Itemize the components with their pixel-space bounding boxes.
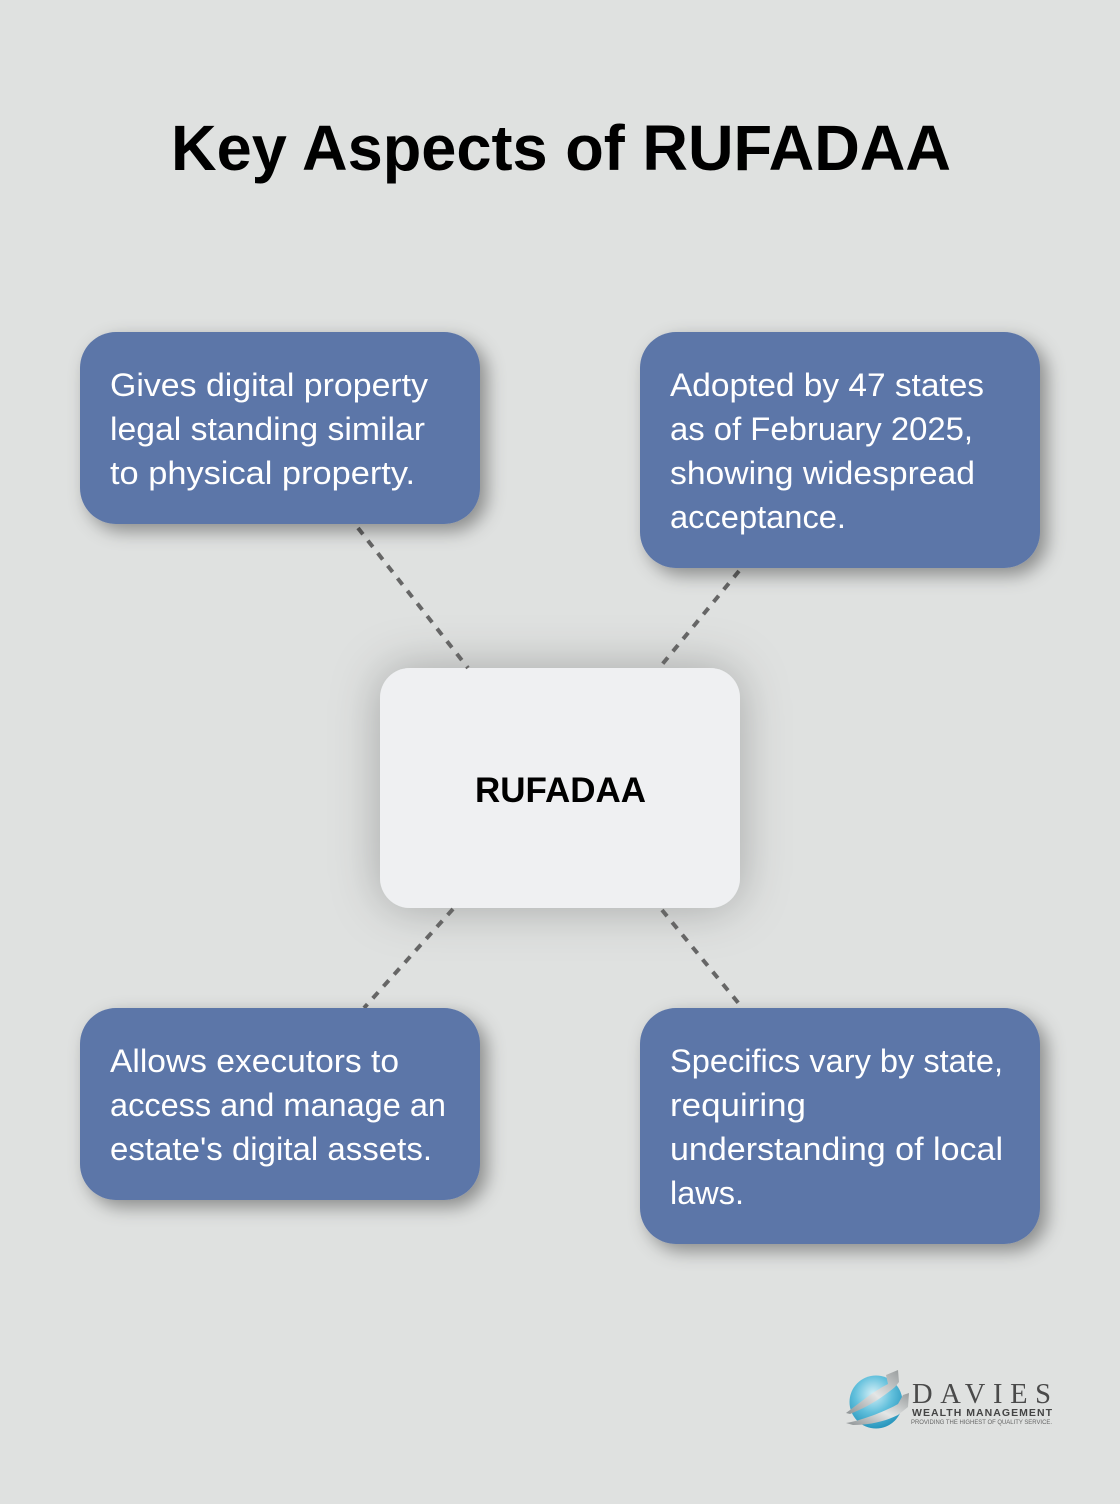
wordmark: DAVIES [912,1379,1051,1410]
panel: state specifics: Specifics vary by state, [670,1043,1003,1079]
panel: executors: access and manage an [110,1087,446,1123]
panel: adoption: Adopted by 47 states [670,367,984,403]
center node: RUFADAA [380,668,740,908]
panel: digital property: Gives digital property [110,367,428,403]
panel: adoption: showing widespread [670,455,975,491]
panel: state specifics: understanding of local [670,1131,1003,1167]
panel: state specifics: requiring [670,1087,806,1123]
subtitle: WEALTH MANAGEMENT [912,1407,1053,1419]
panel: state specifics [640,1008,1040,1244]
tagline: PROVIDING THE HIGHEST OF QUALITY SERVICE. [911,1419,1052,1426]
dashed connectors [358,528,740,1008]
panel: adoption [640,332,1040,568]
panel: adoption: as of February 2025, [670,411,973,447]
panel: digital property [80,332,480,524]
icon: globe with arrows [846,1370,909,1428]
center node: RUFADAA: RUFADAA [475,771,646,810]
panel: adoption: acceptance. [670,499,846,535]
panel: state specifics: laws. [670,1175,744,1211]
panel: digital property: legal standing similar [110,411,425,447]
panel: executors: Allows executors to [110,1043,399,1079]
panel: digital property: to physical property. [110,455,415,491]
title: Key Aspects of RUFADAA [171,112,951,184]
panel: executors [80,1008,480,1200]
logo: Davies Wealth Management [846,1370,1053,1428]
panel: executors: estate's digital assets. [110,1131,432,1167]
